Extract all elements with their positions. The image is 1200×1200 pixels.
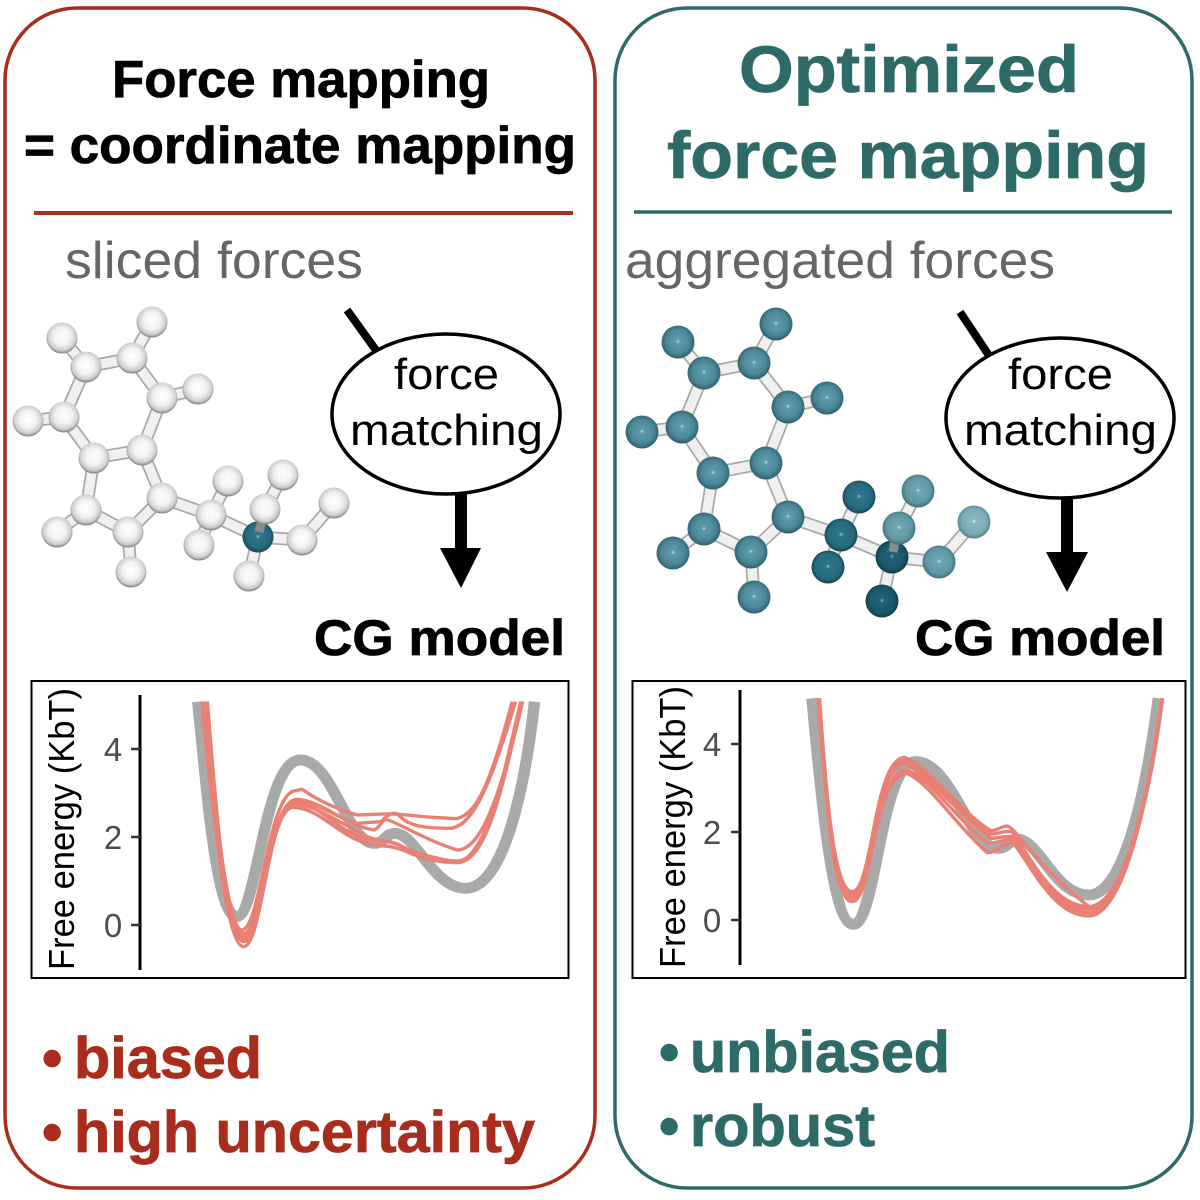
molecule: teal atoms — [626, 308, 990, 618]
label: CG model: CG model — [314, 610, 565, 666]
title: force mapping equals coordinate mapping — [24, 51, 576, 175]
chart: free energy, biased — [32, 681, 568, 978]
bubble: force matching — [946, 338, 1174, 498]
title: optimized force mapping: force mapping — [667, 118, 1149, 192]
chart: free energy, biased: 0 — [104, 907, 122, 944]
chart: free energy, optimized: 2 — [703, 814, 721, 851]
bubble: force matching: force — [1008, 350, 1113, 399]
title: force mapping equals coordinate mapping: Force mapping — [112, 51, 490, 109]
subtitle: sliced forces: sliced forces — [65, 232, 363, 290]
chart: free energy, optimized: Free energy (KbT) — [652, 686, 693, 968]
pointer line to force matching — [960, 312, 990, 357]
bullet list: unbiased, robust — [659, 1020, 950, 1159]
arrow: down to CG model — [1046, 498, 1088, 592]
bullet list: biased, high uncertainty: high uncertainty — [74, 1100, 535, 1165]
bullet list: biased, high uncertainty: • — [42, 1026, 62, 1091]
panel: optimized force mapping — [615, 8, 1192, 1188]
title: optimized force mapping: Optimized — [739, 32, 1079, 106]
title: force mapping equals coordinate mapping: = coordinate mapping — [24, 117, 576, 175]
chart: free energy, biased: Free energy (KbT) — [41, 688, 82, 970]
bubble: force matching: matching — [964, 406, 1157, 455]
bubble: force matching: matching — [350, 406, 543, 455]
bullet list: unbiased, robust: robust — [690, 1094, 875, 1159]
chart: free energy, optimized: 0 — [703, 902, 721, 939]
bullet list: biased, high uncertainty: biased — [74, 1026, 262, 1091]
bubble: force matching — [332, 334, 560, 494]
molecule: white atoms with one teal atom — [12, 306, 350, 592]
bullet list: unbiased, robust: unbiased — [690, 1020, 950, 1085]
bubble: force matching: force — [394, 350, 499, 399]
chart: free energy, biased: 2 — [104, 819, 122, 856]
bullet list: biased, high uncertainty — [42, 1026, 535, 1165]
pointer line to force matching — [347, 310, 378, 353]
title: optimized force mapping — [667, 32, 1149, 192]
arrow: down to CG model — [440, 494, 481, 588]
label: CG model: CG model — [915, 610, 1165, 666]
bullet list: unbiased, robust: • — [659, 1020, 679, 1085]
bullet list: unbiased, robust: • — [659, 1094, 679, 1159]
chart: free energy, optimized — [632, 681, 1186, 978]
bullet list: biased, high uncertainty: • — [42, 1100, 62, 1165]
chart: free energy, optimized: 4 — [703, 726, 721, 763]
subtitle: aggregated forces: aggregated forces — [625, 232, 1055, 290]
chart: free energy, biased: 4 — [104, 731, 122, 768]
panel: force mapping — [5, 8, 595, 1188]
